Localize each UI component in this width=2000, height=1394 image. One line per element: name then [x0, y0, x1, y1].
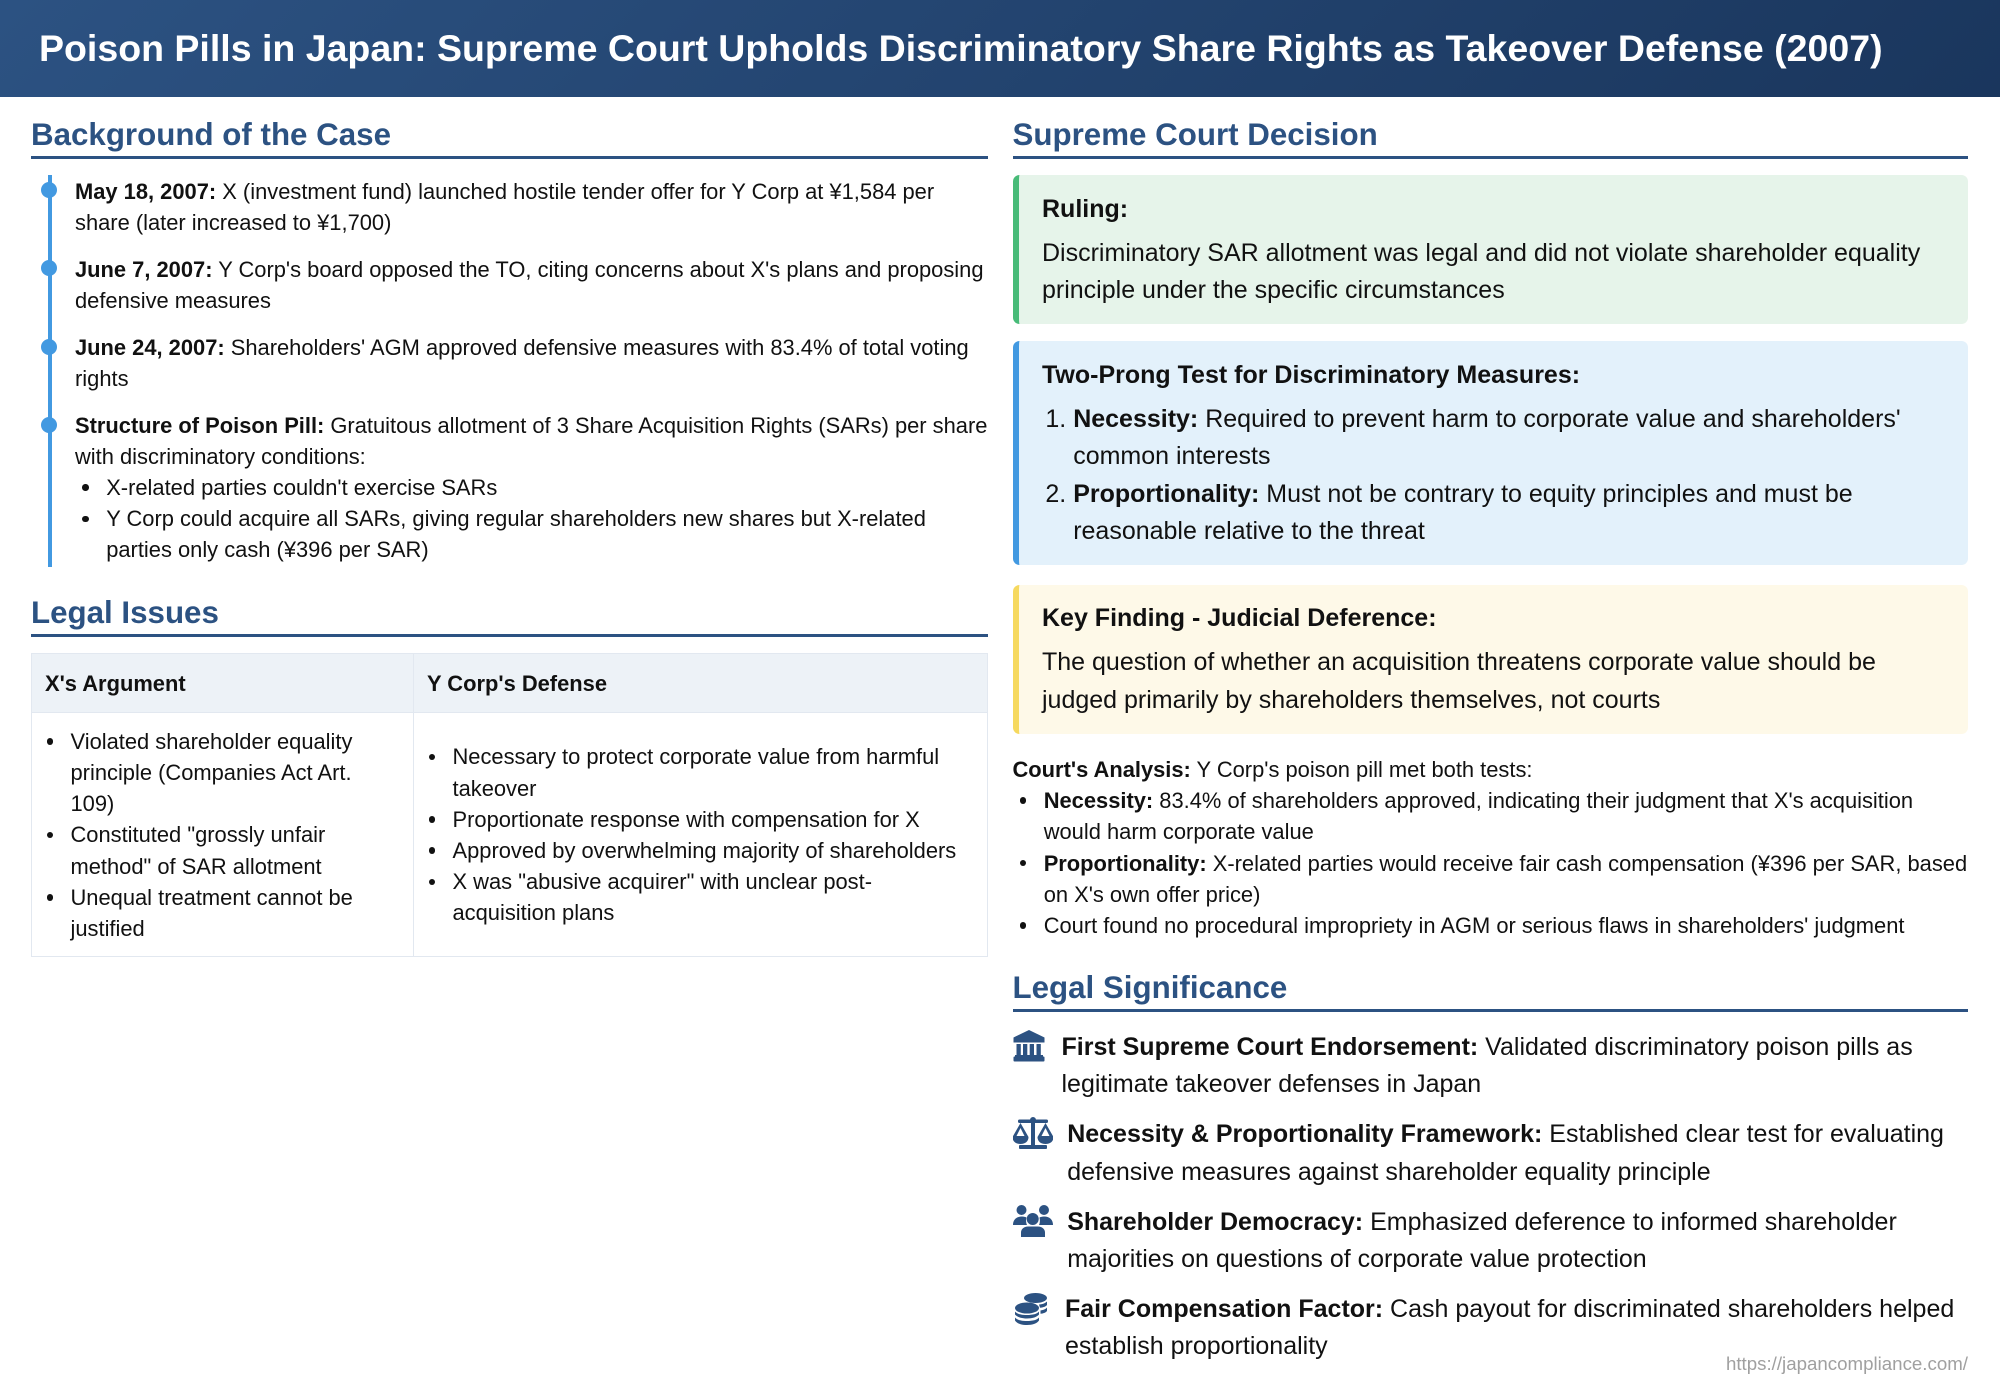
callout: two-prong test	[1012, 341, 1968, 565]
timeline event: June 24: rights	[75, 366, 129, 391]
timeline event: May 18: share (later increased to ¥1,700)	[75, 210, 391, 235]
timeline event: structure of poison pill: with discriminatory conditions:	[75, 444, 366, 469]
callout text: ruling	[1042, 239, 1920, 304]
item text: First Supreme Court Endorsement: Validated discriminatory poison pills as	[1062, 1033, 1913, 1061]
item text	[1062, 1033, 1913, 1098]
text block: court's analysis	[1012, 757, 1967, 938]
icon: scales of justice	[1013, 1117, 1053, 1149]
timeline event: structure of poison pill: X-related parties couldn't exercise SARs	[106, 475, 497, 500]
text block: court's analysis: Necessity: 83.4% of shareholders approved, indicating their judgment that X's acquisition	[1044, 788, 1913, 813]
icon: courthouse	[1014, 1030, 1044, 1062]
footer source url: https://japancompliance.com/	[1726, 1353, 1968, 1374]
item: fair compensation factor	[1015, 1293, 1954, 1360]
callout text: ruling: Discriminatory SAR allotment was legal and did not violate shareholder equality	[1042, 239, 1920, 267]
callout heading: key finding: Key Finding - Judicial Deference:	[1042, 604, 1437, 632]
callout text: key finding: The question of whether an acquisition threatens corporate value should be	[1042, 648, 1876, 676]
item: necessity and proportionality framework	[1013, 1117, 1944, 1186]
timeline event: structure of poison pill: Y Corp could acquire all SARs, giving regular shareholders new shares but X-related	[106, 506, 926, 531]
table: arguments comparison: Y Corp's Defense	[427, 671, 607, 696]
text block: court's analysis: Court found no procedural impropriety in AGM or serious flaws in shareholders' judgment	[1044, 913, 1904, 938]
heading: legal issues: Legal Issues	[31, 594, 219, 630]
timeline event: structure of poison pill: Structure of Poison Pill: Gratuitous allotment of 3 Share Acquisition Rights (SARs) per share	[75, 413, 987, 438]
table: arguments comparison: Violated shareholder equality	[70, 729, 352, 754]
heading: legal significance: Legal Significance	[1012, 970, 1287, 1005]
timeline event: structure of poison pill	[75, 413, 987, 562]
item text	[1065, 1294, 1954, 1360]
item text	[1067, 1208, 1897, 1273]
timeline event: May 18: May 18, 2007: X (investment fund) launched hostile tender offer for Y Corp at ¥1,584 per	[75, 179, 934, 204]
timeline event: June 7: defensive measures	[75, 288, 271, 313]
table: arguments comparison: Unequal treatment cannot be	[70, 885, 353, 910]
timeline event: June 24: June 24, 2007: Shareholders' AGM approved defensive measures with 83.4% of total voting	[75, 334, 969, 360]
heading: supreme court decision	[1012, 115, 1968, 159]
item text	[1067, 1120, 1944, 1186]
timeline event: structure of poison pill: parties only cash (¥396 per SAR)	[106, 537, 429, 562]
callout: ruling	[1012, 175, 1968, 324]
numbered list: necessity and proportionality: common interests	[1073, 442, 1270, 470]
table: arguments comparison: 109)	[70, 791, 114, 816]
item text: majorities on questions of corporate value protection	[1067, 1245, 1647, 1273]
table: arguments comparison: Necessary to protect corporate value from harmful	[452, 744, 939, 769]
callout: key finding	[1012, 585, 1968, 734]
panel: background of the case	[31, 117, 988, 567]
item: first supreme court endorsement	[1014, 1030, 1913, 1098]
heading: supreme court decision: Supreme Court Decision	[1012, 117, 1378, 152]
table: arguments comparison: Constituted "grossly unfair	[70, 822, 325, 847]
timeline event: June 7	[75, 257, 984, 313]
icon: coin stacks	[1015, 1293, 1047, 1325]
timeline	[41, 175, 987, 567]
text block: court's analysis: on X's own offer price)	[1044, 882, 1260, 907]
item: shareholder democracy	[1013, 1205, 1897, 1273]
text block: court's analysis: Court's Analysis: Y Corp's poison pill met both tests:	[1012, 757, 1532, 782]
callout heading: two-prong test: Two-Prong Test for Discriminatory Measures:	[1042, 361, 1580, 389]
table: arguments comparison: method" of SAR allotment	[70, 854, 322, 879]
timeline event: May 18	[75, 179, 934, 235]
callout text: key finding: judged primarily by shareholders themselves, not courts	[1042, 686, 1660, 714]
table: arguments comparison: Proportionate response with compensation for X	[452, 807, 920, 832]
heading: background of the case: Background of the Case	[31, 117, 391, 152]
title: Poison Pills in Japan: Supreme Court Upholds Discriminatory Share Rights as Takeover Defense (2007)	[39, 27, 1883, 69]
numbered list: necessity and proportionality	[1046, 405, 1901, 545]
item text: Fair Compensation Factor: Cash payout for discriminated shareholders helped	[1065, 1294, 1954, 1322]
icon: group of people	[1013, 1205, 1053, 1237]
item text: establish proportionality	[1065, 1332, 1328, 1360]
panel: legal significance	[1012, 970, 1968, 1360]
timeline event: June 7: June 7, 2007: Y Corp's board opposed the TO, citing concerns about X's plans and proposing	[75, 257, 984, 282]
heading: background of the case	[31, 115, 988, 159]
numbered list: necessity and proportionality: reasonable relative to the threat	[1073, 517, 1425, 545]
table: arguments comparison: acquisition plans	[452, 900, 614, 925]
table: arguments comparison: justified	[70, 916, 145, 941]
numbered list: necessity and proportionality: Proportionality: Must not be contrary to equity principles and must be	[1073, 480, 1853, 508]
timeline event: June 24	[75, 334, 969, 391]
item text: legitimate takeover defenses in Japan	[1062, 1070, 1481, 1098]
table: arguments comparison	[31, 653, 988, 957]
item text: Necessity & Proportionality Framework: Established clear test for evaluating	[1067, 1120, 1944, 1148]
item text: Shareholder Democracy: Emphasized deference to informed shareholder	[1067, 1208, 1897, 1236]
table: arguments comparison: X's Argument	[45, 671, 186, 696]
panel: supreme court decision	[1012, 117, 1968, 938]
callout heading: ruling: Ruling:	[1042, 195, 1128, 223]
callout text: key finding	[1041, 648, 1876, 714]
table: arguments comparison: principle (Companies Act Art.	[70, 760, 352, 785]
item text: defensive measures against shareholder equality principle	[1067, 1158, 1711, 1186]
title banner	[0, 0, 2000, 97]
table: arguments comparison: X was "abusive acquirer" with unclear post-	[452, 869, 872, 894]
numbered list: necessity and proportionality: Necessity: Required to prevent harm to corporate value and shareholders'	[1073, 405, 1901, 433]
table: arguments comparison: takeover	[452, 776, 536, 801]
callout text: ruling: principle under the specific circumstances	[1042, 276, 1505, 304]
table: arguments comparison: Approved by overwhelming majority of shareholders	[452, 838, 956, 863]
heading: legal significance	[1012, 968, 1968, 1012]
panel: legal issues	[31, 594, 988, 957]
text block: court's analysis: would harm corporate value	[1044, 819, 1314, 844]
text block: court's analysis: Proportionality: X-related parties would receive fair cash compensation (¥396 per SAR, based	[1044, 850, 1967, 876]
heading: legal issues	[31, 592, 988, 636]
